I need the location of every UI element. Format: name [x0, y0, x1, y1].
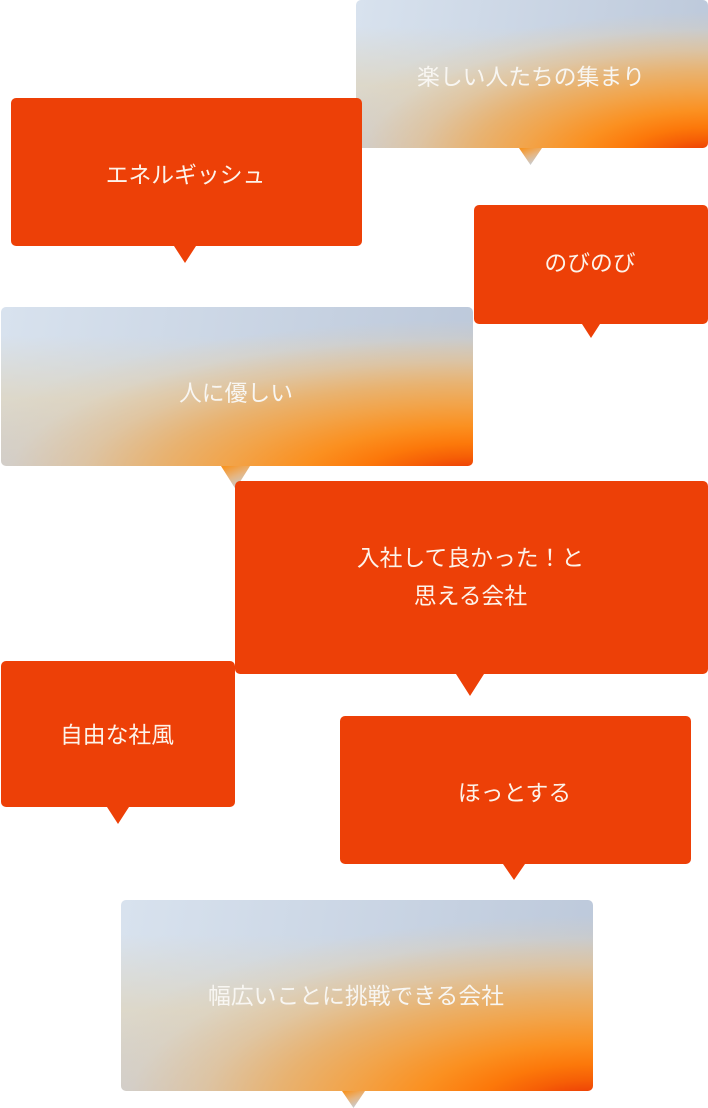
- bubble: エネルギッシュ: [11, 98, 362, 263]
- bubble: 人に優しい: [1, 307, 473, 488]
- bubble: のびのび: [474, 205, 708, 338]
- text: 楽しい人たちの集まり: 楽しい人たちの集まり: [417, 64, 645, 90]
- text: 幅広いことに挑戦できる会社: 幅広いことに挑戦できる会社: [208, 983, 504, 1009]
- text: 入社して良かった！と思える会社: [357, 545, 584, 609]
- bubble: 入社して良かった！と思える会社: [235, 481, 708, 696]
- text: ほっとする: ほっとする: [458, 780, 571, 806]
- bubble: 幅広いことに挑戦できる会社: [121, 900, 593, 1108]
- bubble: 自由な社風: [1, 661, 235, 824]
- text: 入社して良かった！と思える会社: 入社して良かった！と: [357, 545, 584, 571]
- text: のびのび: のびのび: [544, 250, 636, 276]
- text: エネルギッシュ: エネルギッシュ: [106, 162, 265, 188]
- bubble: 楽しい人たちの集まり: [356, 0, 708, 165]
- text: 入社して良かった！と思える会社: 思える会社: [414, 583, 527, 609]
- bubble: ほっとする: [340, 716, 691, 880]
- text: 自由な社風: 自由な社風: [60, 722, 174, 748]
- text: 人に優しい: 人に優しい: [179, 380, 293, 406]
